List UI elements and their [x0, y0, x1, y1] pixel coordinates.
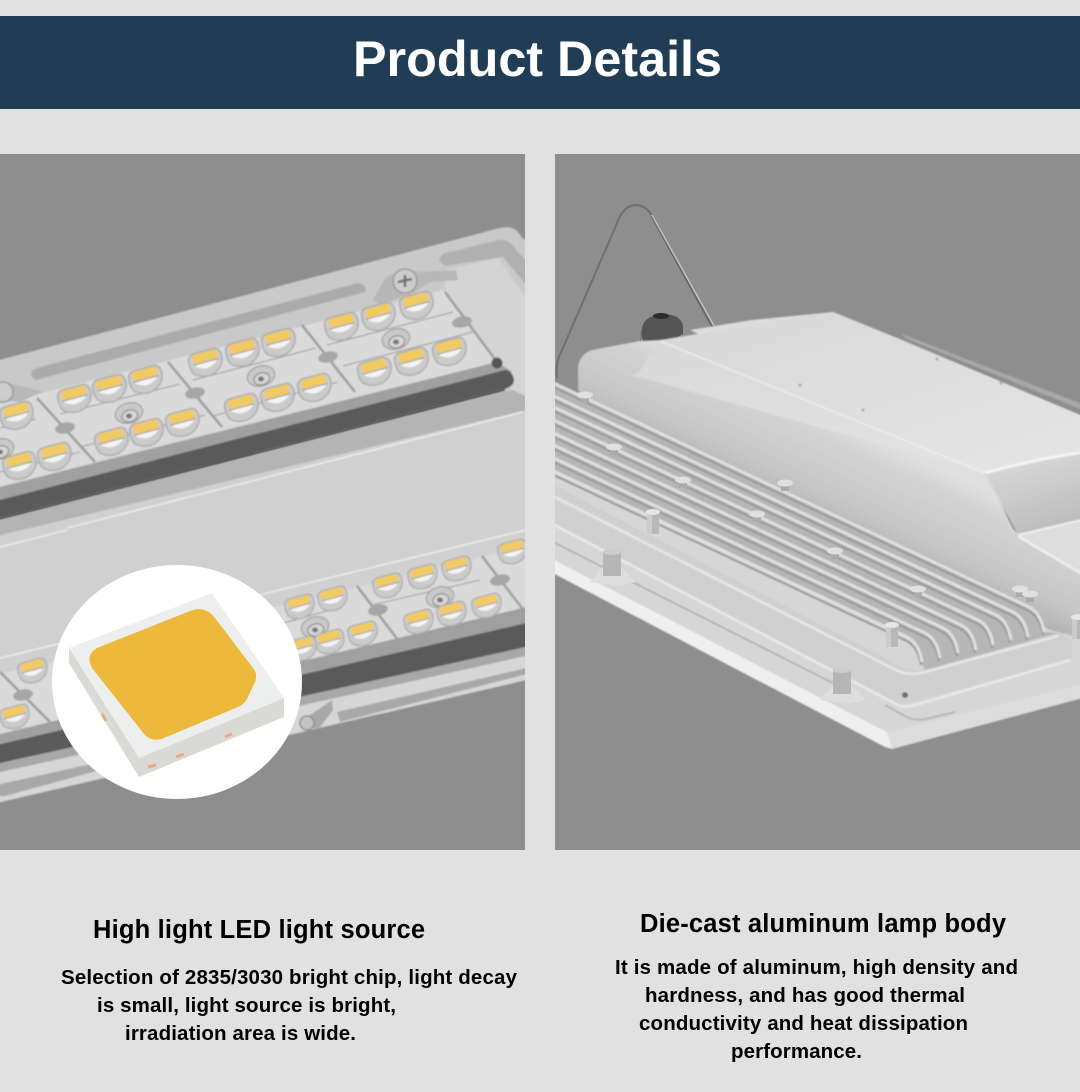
title: Product Details	[353, 31, 722, 87]
right caption	[615, 910, 1018, 1063]
left caption	[61, 916, 518, 1045]
inset circle: SMD LED chip	[52, 565, 302, 799]
header banner	[0, 16, 1080, 109]
heat sink fins	[545, 379, 1058, 670]
left description: irradiation area is wide.	[125, 1022, 356, 1045]
left description: Selection of 2835/3030 bright chip, light decay	[61, 966, 518, 989]
lamp body with LED modules	[0, 227, 535, 804]
mounting flange and tiers	[555, 484, 1080, 750]
right description: It is made of aluminum, high density and	[615, 956, 1018, 979]
lamp housing	[578, 312, 1080, 660]
chip contact marks	[102, 714, 232, 767]
right heading: Die-cast aluminum lamp body	[640, 910, 1007, 938]
right description: hardness, and has good thermal	[645, 984, 965, 1007]
fasteners and posts	[577, 392, 1080, 704]
chip yellow phosphor	[89, 609, 256, 740]
chip top face	[69, 593, 284, 758]
panel: aluminum lamp body photo	[545, 154, 1080, 850]
right description	[615, 956, 1018, 1063]
right description: performance.	[731, 1040, 862, 1063]
left heading: High light LED light source	[93, 916, 425, 944]
panel: LED light source photo	[0, 154, 535, 850]
left description: is small, light source is bright,	[97, 994, 396, 1017]
left description	[61, 966, 518, 1045]
right description: conductivity and heat dissipation	[639, 1012, 968, 1035]
hanging wire bracket	[557, 205, 714, 378]
chip side walls	[69, 648, 284, 777]
cable gland	[640, 313, 683, 342]
